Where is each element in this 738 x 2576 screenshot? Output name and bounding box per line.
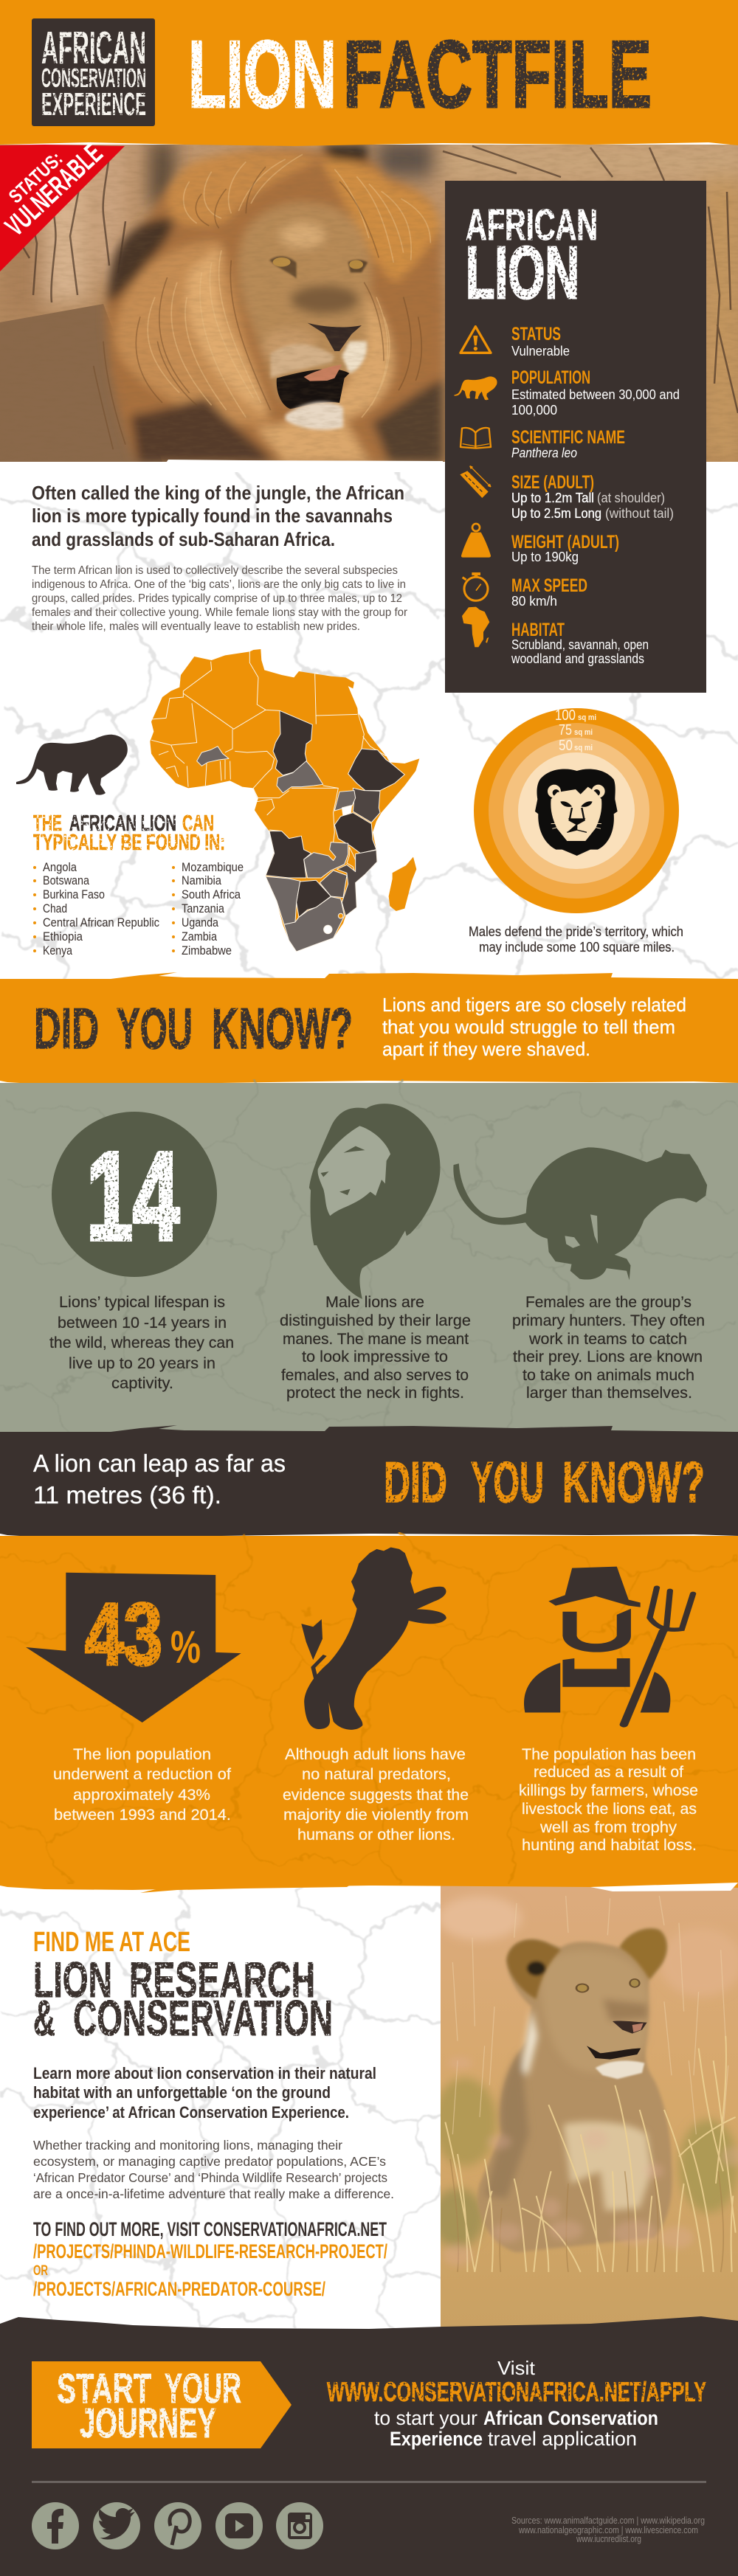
lion silhouette (16, 735, 128, 795)
habitat fact (511, 620, 649, 666)
population text: approximately 43% (73, 1787, 210, 1804)
tiger fact text: that you would struggle to tell them (382, 1016, 675, 1038)
icon: youtube (215, 2502, 263, 2549)
territory caption: Males defend the pride’s territory, which (469, 924, 683, 939)
size fact: SIZE (ADULT) (511, 472, 594, 493)
gray panel background (0, 1083, 738, 1432)
arrow with 43 percent: 43 (85, 1585, 162, 1683)
lifespan text: the wild, whereas they can (49, 1334, 234, 1351)
links: TO FIND OUT MORE, VISIT CONSERVATIONAFRICA.NET (33, 2218, 387, 2240)
intro headline: lion is more typically found in the savannahs (32, 505, 393, 527)
intro headline: Often called the king of the jungle, the African (32, 482, 404, 504)
scientific name fact (511, 427, 625, 460)
start your journey arrow: JOURNEY (80, 2400, 216, 2447)
icon: male lion head (309, 1104, 440, 1299)
countries heading: CAN (182, 810, 214, 836)
lifespan text: captivity. (111, 1375, 173, 1392)
intro body text: indigenous to Africa. One of the ‘big cats’, lions are the only big cats to live in (32, 578, 406, 591)
leap fact text: A lion can leap as far as (33, 1450, 286, 1477)
population fact: 100,000 (511, 403, 557, 418)
Swaziland (338, 913, 343, 918)
intro body text: groups, called prides. Prides typically comprise of up to three males, up to 12 (32, 592, 402, 605)
icon: book (461, 428, 491, 449)
Zimbabwe (320, 870, 347, 898)
research lead text: habitat with an unforgettable ‘on the ground (33, 2083, 331, 2102)
farmers text (519, 1746, 698, 1854)
countries heading: AFRICAN LION (69, 810, 176, 836)
lifespan text: live up to 20 years in (69, 1355, 215, 1372)
icon: rearing lion (301, 1547, 446, 1730)
farmers text: well as from trophy (539, 1819, 677, 1836)
lioness nose and mouth (613, 2021, 647, 2034)
lifespan text: Lions’ typical lifespan is (59, 1294, 225, 1311)
cracked earth texture lower white section (0, 1888, 441, 2328)
heading: did you know: KNOW? (212, 996, 353, 1061)
lion back (0, 304, 162, 462)
male lion text: distinguished by their large (280, 1312, 471, 1329)
orange torn edge above white section (0, 1883, 738, 1893)
tiger fact text: apart if they were shaved. (382, 1038, 590, 1060)
icon: lion head (535, 769, 618, 856)
hunting text: primary hunters. They often (512, 1312, 705, 1329)
lioness photo (430, 1886, 738, 2328)
panel heading (466, 201, 598, 314)
gray panel cracks (0, 1077, 738, 1451)
intro headline: and grasslands of sub-Saharan Africa. (32, 528, 335, 550)
apply call to action: Visit (497, 2357, 536, 2379)
farmers text: killings by farmers, whose (519, 1782, 698, 1799)
territory chart (469, 707, 683, 955)
leap fact text (33, 1450, 286, 1509)
icon: running lioness (453, 1147, 707, 1280)
Angola (266, 831, 311, 878)
logo: African Conservation Experience: AFRICAN (41, 23, 146, 74)
country list: Namibia (182, 873, 221, 887)
size fact (511, 472, 674, 521)
background grass blades (452, 1896, 728, 2134)
status fact (511, 324, 570, 359)
links: /PROJECTS/AFRICAN-PREDATOR-COURSE/ (33, 2278, 325, 2300)
predators text (283, 1746, 469, 1843)
country list (33, 860, 244, 958)
apply call to action: African Conservation (483, 2407, 658, 2429)
country list: Tanzania (182, 901, 224, 915)
icon: lion (454, 376, 497, 400)
male lion text: females, and also serves to (281, 1367, 469, 1384)
tiger fact text (382, 994, 686, 1060)
lifespan circle (52, 1112, 217, 1277)
apply call to action: Experience (390, 2428, 483, 2450)
country list: South Africa (182, 887, 241, 901)
country list: Uganda (182, 915, 218, 929)
start your journey arrow: START (57, 2365, 151, 2412)
predators text: Although adult lions have (285, 1746, 466, 1763)
intro headline (32, 482, 404, 550)
population fact: POPULATION (511, 367, 590, 388)
predators text: majority die violently from (283, 1807, 469, 1824)
scientific name fact: SCIENTIFIC NAME (511, 427, 625, 448)
heading: did you know (384, 1450, 705, 1514)
title: Lion Factfile (188, 21, 652, 128)
header band (0, 0, 738, 146)
research lead text: experience’ at African Conservation Experience. (33, 2103, 349, 2122)
South Africa (284, 897, 345, 952)
country list: Mozambique (182, 860, 244, 874)
research heading: CONSERVATION (73, 1990, 333, 2046)
Ethiopia (348, 749, 404, 791)
sources (511, 2515, 705, 2544)
sources: www.iucnredlist.org (576, 2533, 641, 2544)
lion head and mane (94, 145, 443, 462)
fact panel (445, 181, 706, 693)
torn white edge under hero (0, 460, 443, 472)
arrow with 43 percent (26, 1573, 241, 1722)
scientific name fact: Panthera leo (511, 446, 577, 460)
countries heading (33, 810, 225, 855)
countries heading: TYPICALLY BE FOUND IN: (33, 829, 225, 855)
hero photo: male lion (0, 140, 738, 465)
ring labels: 75 (559, 722, 572, 738)
lioness eyes (576, 1984, 589, 1992)
panel heading: AFRICAN (466, 201, 598, 249)
icon: weight (461, 524, 491, 558)
population text: underwent a reduction of (53, 1766, 231, 1783)
lifespan text: between 10 -14 years in (58, 1315, 227, 1332)
ring labels: 50 (559, 738, 573, 754)
start your journey arrow: YOUR (165, 2365, 241, 2412)
habitat fact: woodland and grasslands (511, 651, 644, 666)
weight fact: Up to 190kg (511, 550, 579, 564)
research heading (33, 1952, 333, 2046)
logo: African Conservation Experience: EXPERIENCE (41, 86, 146, 122)
population fact (511, 367, 680, 418)
hunting text: larger than themselves. (526, 1385, 692, 1402)
orange panel cracks (0, 1530, 738, 1892)
Zambia (304, 842, 348, 878)
Madagascar (389, 857, 416, 911)
find me heading: FIND ME AT ACE (33, 1927, 190, 1958)
lifespan text (49, 1294, 234, 1392)
heading: did you know: YOU (117, 996, 193, 1061)
arrow with 43 percent: % (170, 1622, 201, 1673)
links: OR (33, 2263, 48, 2279)
intro body text: The term African lion is used to collectively describe the several subspecies (32, 564, 398, 577)
icon: warning triangle (461, 327, 491, 353)
Burkina Faso (197, 747, 229, 766)
lion muzzle (271, 344, 334, 378)
Tanzania (334, 813, 376, 854)
heading: did you know (34, 996, 353, 1061)
concentric territory rings (474, 708, 679, 913)
status ribbon: VULNERABLE (0, 138, 108, 243)
cracked earth texture upper white section (0, 472, 738, 979)
status ribbon (0, 138, 125, 271)
max speed fact: MAX SPEED (511, 575, 587, 596)
size fact: (at shoulder) (597, 491, 665, 505)
research body text: are a once-in-a-lifetime adventure that really make a difference. (33, 2187, 394, 2201)
lioness body (477, 1929, 672, 2252)
mane hair strands (148, 154, 430, 418)
territory caption: may include some 100 square miles. (479, 940, 675, 955)
research heading: RESEARCH (129, 1952, 315, 2008)
territory caption (469, 924, 683, 955)
lion eyes (269, 256, 297, 279)
icon: pinterest (154, 2502, 201, 2549)
orange threats panel (0, 1530, 738, 1892)
heading: did you know: YOU (471, 1450, 544, 1514)
title: Lion Factfile: LION (188, 21, 337, 128)
weight fact: WEIGHT (ADULT) (511, 532, 619, 553)
male lion text: Male lions are (325, 1294, 424, 1311)
foreground grass (445, 2036, 736, 2272)
social icons (32, 2502, 323, 2549)
farmers text: hunting and habitat loss. (522, 1837, 697, 1854)
habitat fact: Scrubland, savannah, open (511, 637, 649, 652)
ring labels: sq mi (574, 744, 593, 752)
Lesotho (324, 925, 332, 934)
apply call to action: travel application (488, 2428, 637, 2450)
list bullets (33, 866, 175, 952)
research heading: & (33, 1990, 55, 2046)
farmers text: reduced as a result of (534, 1764, 683, 1781)
research heading: LION (33, 1952, 112, 2008)
ring labels: sq mi (574, 728, 593, 737)
status fact: STATUS (511, 324, 561, 344)
intro body text: females and their collective young. While female lions stay with the group for (32, 606, 408, 619)
status ribbon: STATUS: (4, 147, 66, 207)
country list: Zimbabwe (182, 944, 232, 958)
band background (0, 1425, 738, 1538)
leap fact text: 11 metres (36 ft). (33, 1481, 221, 1509)
population text (53, 1746, 231, 1824)
footer (0, 2316, 738, 2576)
dark fact band: leap (0, 1425, 738, 1538)
apply call to action (327, 2357, 706, 2450)
apply call to action: to start your (374, 2407, 477, 2429)
country list: Kenya (43, 944, 72, 958)
links: /PROJECTS/PHINDA-WILDLIFE-RESEARCH-PROJECT/ (33, 2240, 387, 2262)
research lead text (33, 2064, 376, 2122)
male lion text: protect the neck in fights. (286, 1385, 464, 1402)
country list: Angola (43, 860, 77, 874)
icon: Africa (462, 607, 489, 647)
Kenya (353, 788, 380, 823)
icon: farmer with pitchfork (524, 1567, 693, 1725)
size fact: Up to 2.5m Long (511, 506, 601, 521)
hunting text: their prey. Lions are known (513, 1348, 703, 1365)
Botswana (297, 880, 331, 917)
intro body text (32, 564, 408, 633)
orange panel background (0, 1536, 738, 1886)
tiger fact text: Lions and tigers are so closely related (382, 994, 686, 1016)
Mozambique (337, 850, 377, 916)
countries heading: THE (33, 810, 62, 836)
size fact: Up to 1.2m Tall (511, 491, 594, 505)
population text: between 1993 and 2014. (54, 1807, 231, 1824)
panel background (445, 181, 706, 693)
habitat fact: HABITAT (511, 620, 565, 640)
Malawi (347, 847, 359, 874)
ring labels: sq mi (578, 713, 596, 722)
heading: did you know: DID (384, 1450, 447, 1514)
research body text: ecosystem, or managing captive predator populations, ACE’s (33, 2154, 386, 2169)
country list: Central African Republic (43, 915, 159, 929)
ring labels: 100 (555, 707, 576, 724)
footer background (0, 2316, 738, 2576)
fact band: tigers (0, 972, 738, 1085)
male lion text (280, 1294, 471, 1402)
hunting text (512, 1294, 705, 1402)
country list: Ethiopia (43, 929, 83, 944)
start your journey arrow (32, 2361, 292, 2448)
Chad (273, 710, 312, 775)
Uganda (334, 791, 356, 811)
weight fact (511, 532, 619, 564)
predators text: evidence suggests that the (283, 1787, 469, 1804)
sources: www.nationalgeographic.com | www.livescience.com (518, 2524, 698, 2535)
status fact: Vulnerable (511, 344, 570, 359)
country list: Zambia (182, 929, 217, 944)
country list: Chad (43, 901, 67, 915)
research body text: ‘African Predator Course’ and ‘Phinda Wildlife Research’ projects (33, 2170, 387, 2185)
population text: The lion population (73, 1746, 211, 1763)
hunting text: Females are the group’s (525, 1294, 692, 1311)
Namibia (266, 876, 300, 924)
size fact: (without tail) (605, 506, 674, 521)
research body text (33, 2138, 394, 2201)
country list: Botswana (43, 873, 89, 887)
male lion text: manes. The mane is meant (283, 1331, 469, 1348)
heading: did you know: DID (34, 996, 99, 1061)
hunting text: work in teams to catch (528, 1331, 687, 1348)
ring labels (555, 707, 596, 754)
icon: stopwatch (463, 572, 488, 600)
pink grass seed heads (443, 2057, 738, 2266)
male lion text: to look impressive to (302, 1348, 448, 1365)
logo: African Conservation Experience (32, 18, 155, 126)
farmers text: livestock the lions eat, as (522, 1801, 697, 1818)
icon: twitter (93, 2502, 140, 2549)
band background (0, 972, 738, 1085)
research body text: Whether tracking and monitoring lions, managing their (33, 2138, 342, 2153)
max speed fact (511, 575, 587, 609)
predators text: no natural predators, (302, 1766, 451, 1783)
predators text: humans or other lions. (297, 1827, 455, 1843)
intro body text: their whole life, males will eventually leave to establish new prides. (32, 620, 360, 633)
research section text (33, 1927, 394, 2300)
links (33, 2218, 387, 2300)
lifespan circle: 14 (86, 1126, 179, 1267)
icon: facebook (32, 2502, 79, 2549)
icon: ruler (460, 466, 491, 498)
country list: Burkina Faso (43, 887, 105, 901)
max speed fact: 80 km/h (511, 594, 557, 609)
farmers text: The population has been (522, 1746, 696, 1763)
hunting text: to take on animals much (523, 1367, 694, 1384)
gray facts panel (0, 1077, 738, 1451)
population fact: Estimated between 30,000 and (511, 387, 680, 402)
panel heading: LION (466, 232, 579, 314)
Lake Victoria (342, 806, 352, 817)
map of Africa (150, 649, 419, 952)
research lead text: Learn more about lion conservation in their natural (33, 2064, 376, 2082)
icon: instagram (276, 2502, 323, 2549)
grass background tones (430, 1896, 738, 2248)
Central African Republic (277, 761, 323, 793)
logo: African Conservation Experience: CONSERVATION (41, 63, 146, 93)
orange header background (0, 0, 738, 146)
